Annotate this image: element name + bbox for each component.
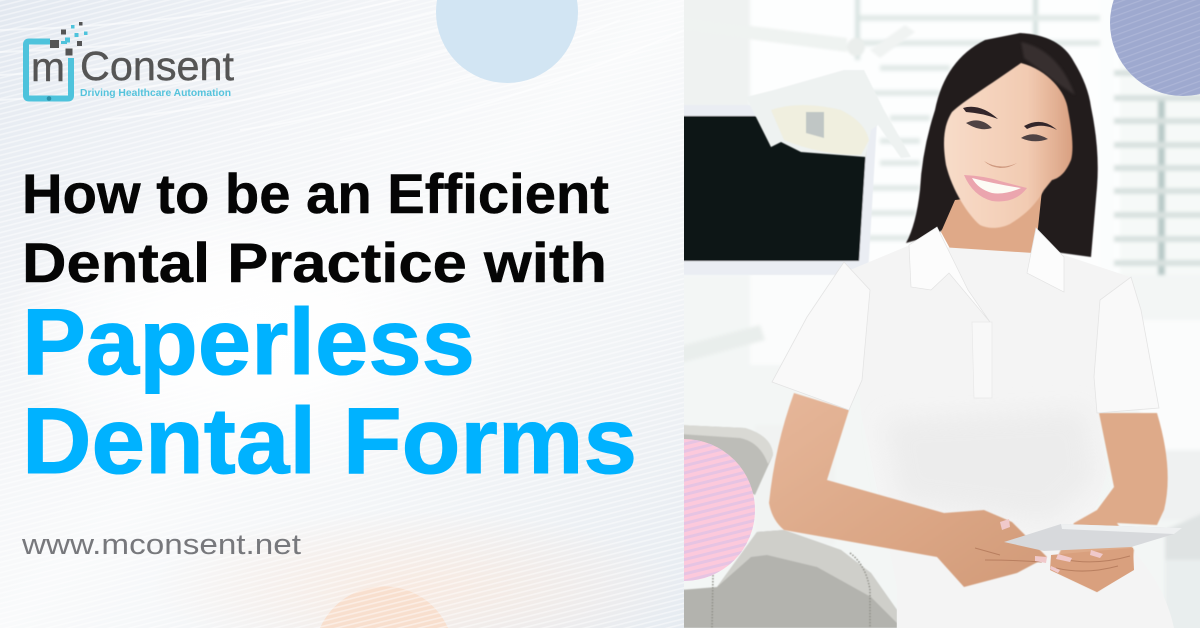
decorative circle: bottom peach [320,586,448,628]
decorative circle: top right violet [1110,0,1200,96]
finger lines [975,548,1130,571]
title [22,162,637,493]
chair headrest [684,434,772,496]
eyes [966,120,1048,141]
photo background: window and blinds [670,0,1200,628]
logo word Consent: Consent [80,43,235,89]
logo tagline: Driving Healthcare Automation [80,87,231,99]
monitor frame [680,105,878,275]
website url: www.mconsent.net [21,529,301,561]
dental equipment arm [750,26,913,56]
shirt shadow [885,410,1095,520]
dental lamp [746,70,911,158]
monitor [680,105,878,275]
collar [909,227,990,322]
arm right and hand [1051,413,1168,592]
heading line 4: Dental Forms [22,388,637,493]
icon: tablet frame [26,42,71,98]
arm left [769,393,1047,587]
hair highlight [1021,42,1075,95]
tablet [1004,524,1182,551]
smile [964,175,1027,201]
logo letter m: m [31,44,65,90]
heading line 3: Paperless [22,289,475,394]
placket [972,322,992,398]
sleeve left [772,262,870,410]
face [944,63,1072,228]
sleeve right [1094,277,1159,413]
shirt body [850,245,1174,628]
chair chain [850,553,870,628]
heading line 1: How to be an Efficient [22,162,609,225]
hair [906,33,1098,257]
nose [984,161,1017,168]
monitor screen [680,116,868,261]
icon: pixel squares [50,22,88,56]
icon: tablet button [47,96,51,101]
chair back [684,554,897,628]
decorative circle: pink [684,439,755,581]
dental chair [680,425,897,628]
panel: left background [0,0,684,628]
neck [941,192,1042,253]
finger nails [1000,519,1103,573]
decorative circle: top blue [436,0,578,83]
heading line 2: Dental Practice with [22,231,607,294]
logo: mConsent [26,22,235,101]
photo: dentist in clinic [684,0,1200,628]
fingers [1050,548,1134,592]
eyebrows [963,107,1057,130]
woman [769,33,1182,628]
